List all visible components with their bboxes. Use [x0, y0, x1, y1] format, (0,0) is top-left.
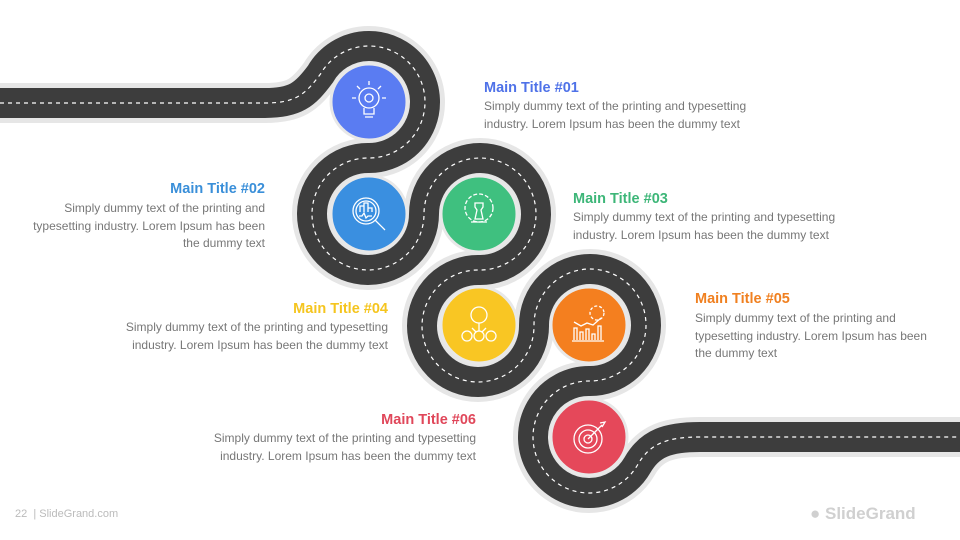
text: industry. Lorem Ipsum has been the dummy text [573, 228, 829, 242]
text: typesetting industry. Lorem Ipsum has been [695, 328, 927, 342]
text: industry. Lorem Ipsum has been the dummy text [484, 116, 740, 130]
text: Simply dummy text of the printing and typesetting [573, 210, 835, 224]
circle 4 [441, 287, 517, 363]
text 04: Main Title #04 [293, 301, 388, 317]
text: industry. Lorem Ipsum has been the dummy text [220, 448, 476, 462]
circle 6 [551, 399, 627, 475]
circle 2 [331, 176, 407, 252]
circle 1 [331, 64, 407, 140]
text: Simply dummy text of the printing and typesetting [126, 320, 388, 334]
text 01: Main Title #01 [484, 80, 579, 96]
footer page number: 22 | SlideGrand.com [15, 508, 118, 520]
text: typesetting industry. Lorem Ipsum has been [33, 218, 265, 232]
text: industry. Lorem Ipsum has been the dummy text [132, 338, 388, 352]
text 06: Main Title #06 [381, 412, 476, 428]
text 03: Main Title #03 [573, 191, 668, 207]
text: Simply dummy text of the printing and [64, 201, 265, 215]
text 05: Main Title #05 [695, 291, 790, 307]
text: the dummy text [695, 346, 777, 360]
footer logo: ● SlideGrand [810, 504, 916, 523]
text: Simply dummy text of the printing and typesetting [214, 431, 476, 445]
text: Simply dummy text of the printing and [695, 311, 896, 325]
circle 3 [441, 176, 517, 252]
text: Simply dummy text of the printing and typesetting [484, 99, 746, 113]
text 02: Main Title #02 [170, 181, 265, 197]
circle 5 [551, 287, 627, 363]
text: the dummy text [183, 236, 265, 250]
